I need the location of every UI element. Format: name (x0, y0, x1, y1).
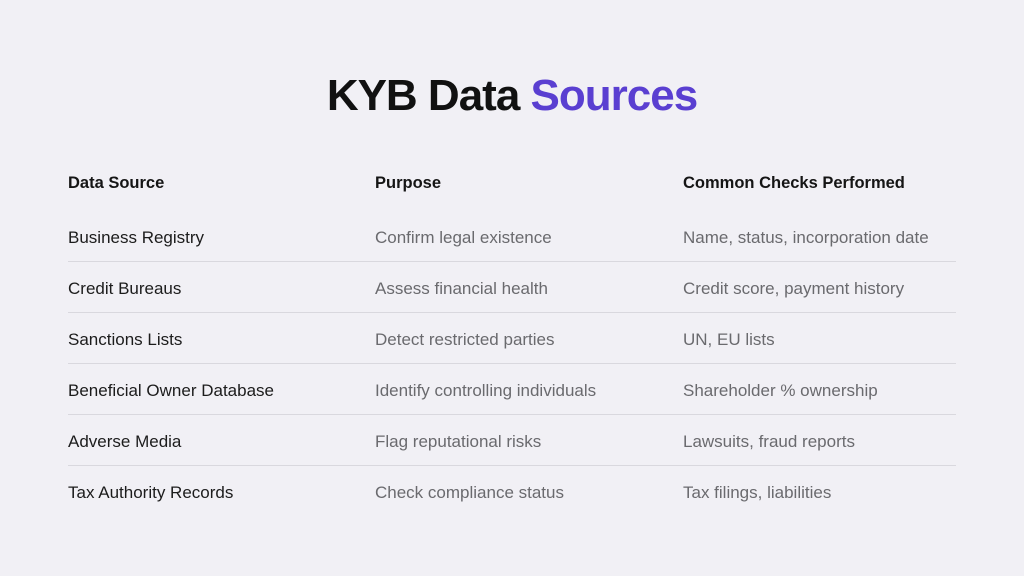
row: business registry: Business Registry (68, 228, 204, 247)
row: sanctions lists: Sanctions Lists (68, 330, 182, 349)
row: credit bureaus (68, 262, 956, 313)
row: sanctions lists: UN, EU lists (683, 330, 775, 349)
row: adverse media: Adverse Media (68, 432, 181, 451)
row: beneficial owner database: Shareholder % ownership (683, 381, 878, 400)
row: adverse media: Lawsuits, fraud reports (683, 432, 855, 451)
row: business registry: Name, status, incorporation date (683, 228, 929, 247)
row: beneficial owner database: Identify controlling individuals (375, 381, 596, 400)
row: credit bureaus: Credit score, payment history (683, 279, 904, 298)
table header: Purpose (375, 174, 441, 192)
row: sanctions lists (68, 313, 956, 364)
table: data sources (68, 174, 956, 502)
row: tax authority records (68, 483, 831, 502)
row: business registry: Confirm legal existence (375, 228, 552, 247)
row: beneficial owner database (68, 364, 956, 415)
title: KYB Data Sources (327, 71, 697, 120)
row: business registry (68, 211, 956, 262)
table header: Common Checks Performed (683, 174, 905, 192)
row: tax authority records: Tax filings, liabilities (683, 483, 831, 502)
row: tax authority records: Check compliance status (375, 483, 564, 502)
row: credit bureaus: Credit Bureaus (68, 279, 181, 298)
row: tax authority records: Tax Authority Records (68, 483, 233, 502)
row: adverse media (68, 415, 956, 466)
row: credit bureaus: Assess financial health (375, 279, 548, 298)
table header (68, 174, 905, 192)
row: beneficial owner database: Beneficial Owner Database (68, 381, 274, 400)
table header: Data Source (68, 174, 164, 192)
row: adverse media: Flag reputational risks (375, 432, 541, 451)
row: sanctions lists: Detect restricted parties (375, 330, 555, 349)
